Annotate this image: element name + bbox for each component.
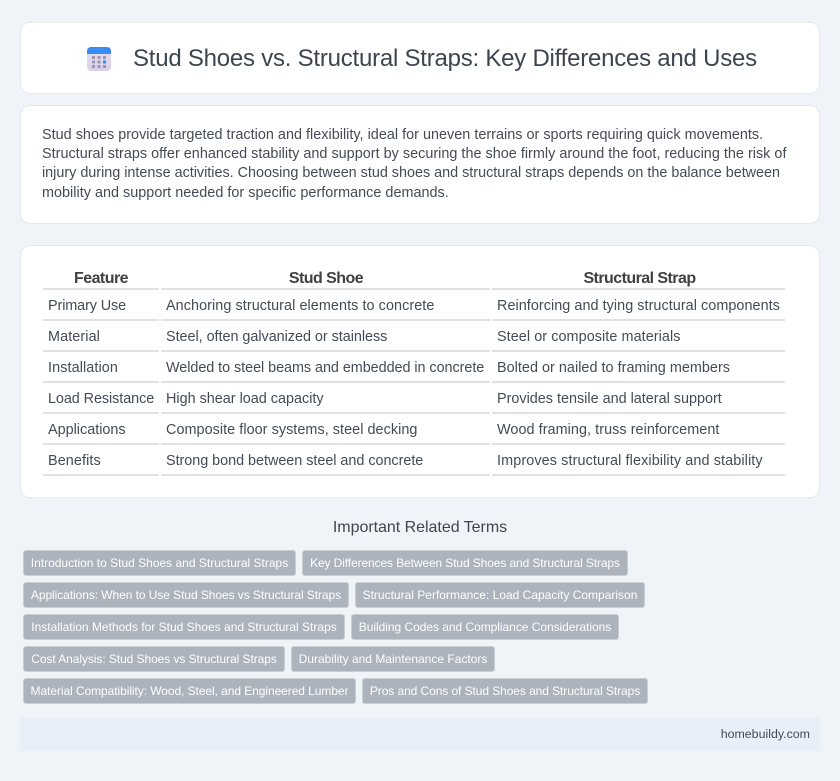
row: primary use: Primary Use xyxy=(48,298,126,314)
row: installation xyxy=(48,360,730,376)
intro text: mobility and support needed for specific performance demands. xyxy=(42,185,449,201)
related terms heading: Important Related Terms xyxy=(333,519,507,536)
row: installation: Bolted or nailed to framing members xyxy=(497,360,730,376)
row: material: Steel, often galvanized or stainless xyxy=(166,329,387,345)
tag: Structural Performance: Load Capacity Comparison xyxy=(363,588,637,602)
intro panel xyxy=(20,105,820,224)
tag xyxy=(355,582,645,608)
row: load resistance: Load Resistance xyxy=(48,391,154,407)
row: installation: Installation xyxy=(48,360,118,376)
intro text: Stud shoes provide targeted traction and flexibility, ideal for uneven terrains or sports requiring quick movements. xyxy=(42,127,763,143)
row: applications: Composite floor systems, steel decking xyxy=(166,422,417,438)
row: installation: Welded to steel beams and embedded in concrete xyxy=(166,360,484,376)
table header xyxy=(74,270,696,287)
row: benefits xyxy=(48,453,763,469)
comparison table panel xyxy=(20,245,820,498)
row: applications: Applications xyxy=(48,422,126,438)
tag: Applications: When to Use Stud Shoes vs Structural Straps xyxy=(31,588,341,602)
row: material: Steel or composite materials xyxy=(497,329,681,345)
row: applications xyxy=(48,422,720,438)
row: load resistance xyxy=(48,391,722,407)
row: material xyxy=(48,329,681,345)
tag xyxy=(23,582,349,608)
tag xyxy=(23,678,356,704)
row: benefits: Improves structural flexibility and stability xyxy=(497,453,763,469)
row: benefits: Strong bond between steel and concrete xyxy=(166,453,423,469)
tag: Material Compatibility: Wood, Steel, and Engineered Lumber xyxy=(31,684,348,698)
row: load resistance: High shear load capacity xyxy=(166,391,324,407)
intro text: injury during intense activities. Choosing between stud shoes and structural straps depends on the balance between xyxy=(42,165,780,181)
row: material: Material xyxy=(48,329,100,345)
header panel xyxy=(20,22,820,94)
tag: Introduction to Stud Shoes and Structural Straps xyxy=(31,556,288,570)
tag xyxy=(362,678,648,704)
row: load resistance: Provides tensile and lateral support xyxy=(497,391,722,407)
row: primary use: Anchoring structural elements to concrete xyxy=(166,298,434,314)
table header: Stud Shoe xyxy=(289,270,363,287)
icon: calendar grid xyxy=(87,47,111,71)
tag: Key Differences Between Stud Shoes and Structural Straps xyxy=(310,556,620,570)
footer site name: homebuildy.com xyxy=(721,727,810,741)
intro text: Structural straps offer enhanced stability and support by securing the shoe firmly around the foot, reducing the risk of xyxy=(42,146,786,162)
row: primary use: Reinforcing and tying structural components xyxy=(497,298,780,314)
table header: Feature xyxy=(74,270,128,287)
tag xyxy=(23,614,345,640)
row: applications: Wood framing, truss reinforcement xyxy=(497,422,719,438)
tag: Pros and Cons of Stud Shoes and Structural Straps xyxy=(370,684,640,698)
tag: Cost Analysis: Stud Shoes vs Structural Straps xyxy=(31,652,277,666)
title: Stud Shoes vs. Structural Straps: Key Differences and Uses xyxy=(133,45,757,72)
row: primary use xyxy=(48,298,780,314)
tag xyxy=(302,550,628,576)
tag: Building Codes and Compliance Considerations xyxy=(359,620,611,634)
related terms tags xyxy=(23,550,648,704)
footer bar xyxy=(20,717,820,751)
tag xyxy=(351,614,619,640)
table xyxy=(43,270,785,476)
tag: Durability and Maintenance Factors xyxy=(299,652,487,666)
intro text xyxy=(42,127,787,201)
row: benefits: Benefits xyxy=(48,453,101,469)
tag: Installation Methods for Stud Shoes and Structural Straps xyxy=(31,620,337,634)
tag xyxy=(291,646,495,672)
table header: Structural Strap xyxy=(583,270,696,287)
tag xyxy=(23,646,285,672)
tag xyxy=(23,550,296,576)
